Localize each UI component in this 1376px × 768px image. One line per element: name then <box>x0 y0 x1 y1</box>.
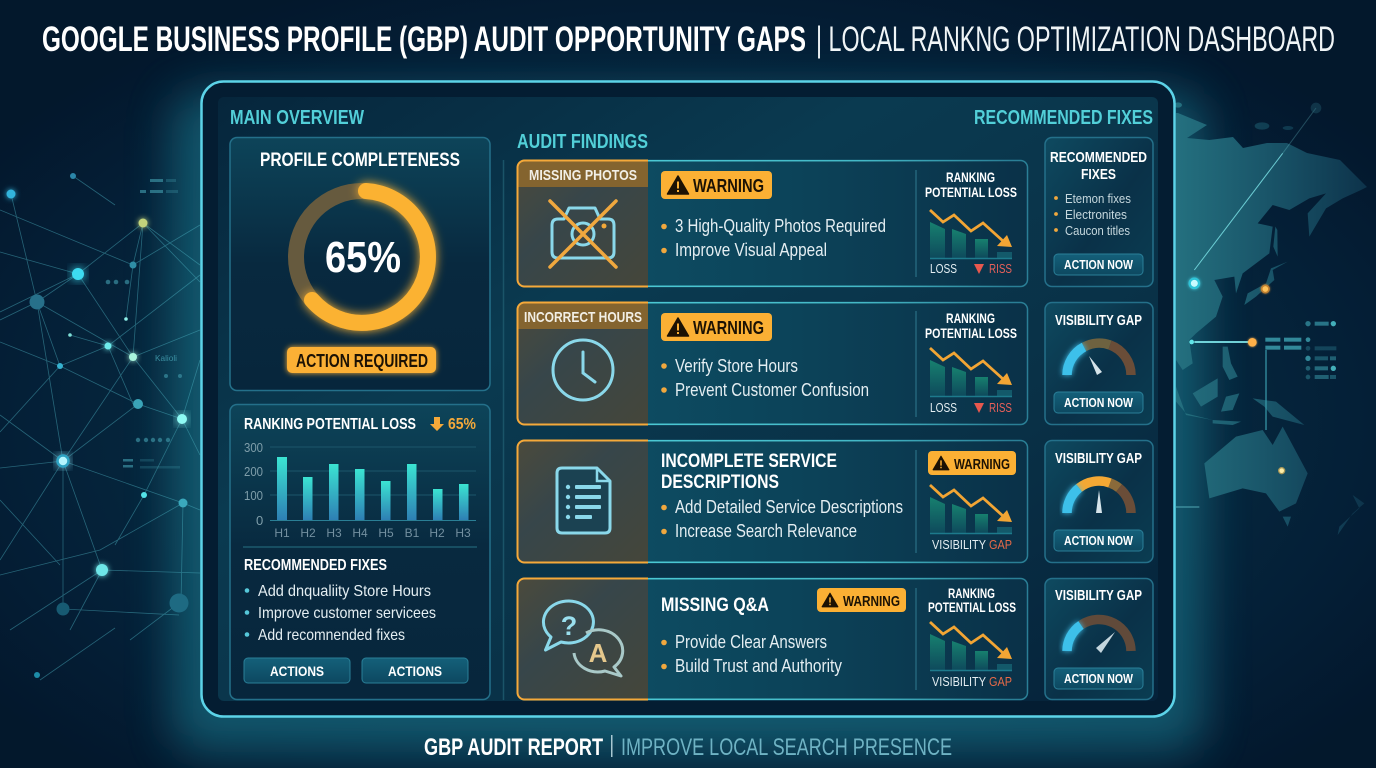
gauge <box>1067 343 1131 375</box>
chart with ranking and visibility labels <box>928 586 1016 689</box>
list: Caucon titles <box>1065 224 1130 238</box>
heading: recommended fixes: RECOMMENDED FIXES <box>244 557 387 574</box>
recommended fixes list: Add recomnended fixes <box>258 627 405 644</box>
donut chart: 65 percent <box>296 191 428 323</box>
list: Etemon fixes <box>1065 192 1131 206</box>
recommended fixes list <box>245 583 436 644</box>
bar chart: H4 <box>352 526 368 540</box>
action now button: ACTION NOW <box>1064 258 1133 272</box>
actions button <box>362 658 468 683</box>
ranking potential loss chart: RANKING <box>946 310 995 326</box>
title: GOOGLE BUSINESS PROFILE (GBP) AUDIT OPPORTUNITY GAPS <box>42 20 806 59</box>
list <box>1054 192 1131 238</box>
gauge <box>1067 481 1131 513</box>
visibility gap chart: GAP <box>989 537 1012 552</box>
panel: incomplete service descriptions <box>518 440 1028 563</box>
action now button: ACTION NOW <box>1064 534 1133 548</box>
bar chart: H3 <box>455 526 471 540</box>
bar chart: H1 <box>274 526 290 540</box>
percent value: 65% <box>325 233 401 282</box>
finding title: DESCRIPTIONS <box>661 471 779 493</box>
panel: ranking potential loss <box>230 404 490 700</box>
footer caption: IMPROVE LOCAL SEARCH PRESENCE <box>621 734 952 761</box>
heading: FIXES <box>1081 166 1116 183</box>
panel: recommended fixes mini <box>1045 138 1153 286</box>
chart with ranking and visibility labels: GAP <box>989 674 1012 689</box>
ranking potential loss chart <box>925 169 1017 276</box>
icon: question and answer bubbles <box>543 601 623 676</box>
bar chart: 200 <box>244 464 263 479</box>
ranking potential loss chart: POTENTIAL LOSS <box>925 184 1017 200</box>
warning badge: WARNING <box>693 318 764 338</box>
warning badge: WARNING <box>843 594 900 610</box>
bullet list: Increase Search Relevance <box>675 521 857 541</box>
heading <box>1050 149 1147 183</box>
finding title: MISSING Q&A <box>661 594 769 616</box>
warning badge <box>928 451 1016 475</box>
heading: VISIBILITY GAP <box>1055 313 1142 329</box>
loss indicator <box>430 416 476 433</box>
warning badge <box>661 313 772 341</box>
bar chart <box>244 440 476 540</box>
ranking potential loss chart <box>925 310 1017 415</box>
label: INCORRECT HOURS <box>524 309 642 326</box>
dashboard frame <box>202 82 1174 716</box>
network graph background <box>0 173 200 680</box>
finding title: INCOMPLETE SERVICE <box>661 450 837 472</box>
bar chart: 0 <box>256 513 263 528</box>
bullet list: Prevent Customer Confusion <box>675 380 869 400</box>
ranking potential loss chart: LOSS <box>930 261 957 276</box>
icon: question and answer bubbles: A <box>589 638 608 668</box>
warning badge: WARNING <box>954 457 1010 473</box>
action now button: ACTION NOW <box>1064 672 1133 686</box>
list: Electronites <box>1065 208 1127 222</box>
network graph background: Kalioli <box>155 354 177 363</box>
bullet list: Add Detailed Service Descriptions <box>675 497 903 517</box>
bullet list <box>661 497 903 541</box>
warning badge: WARNING <box>693 176 764 196</box>
panel: missing q and a <box>518 578 1028 700</box>
panel: visibility gap three <box>1045 578 1153 700</box>
chart with ranking and visibility labels: VISIBILITY <box>932 674 986 689</box>
icon: crossed camera <box>550 201 616 267</box>
bar chart: B1 <box>405 526 420 540</box>
panel: visibility gap two <box>1045 440 1153 562</box>
bar chart: 300 <box>244 440 263 455</box>
chart with ranking and visibility labels: RANKING <box>948 586 995 601</box>
visibility gap chart: VISIBILITY <box>932 537 986 552</box>
panel: incorrect hours <box>518 302 1028 425</box>
bullet list <box>661 632 842 676</box>
bar chart: H2 <box>429 526 445 540</box>
gauge <box>1067 619 1131 653</box>
finding title <box>661 450 837 493</box>
bar chart: H3 <box>326 526 342 540</box>
action required badge <box>287 347 436 373</box>
actions button: ACTIONS <box>388 663 442 679</box>
panel: visibility gap one <box>1045 302 1153 424</box>
icon: document <box>557 468 610 533</box>
world map background <box>1174 102 1367 535</box>
heading: RANKING POTENTIAL LOSS <box>244 416 416 433</box>
loss indicator: 65% <box>448 416 476 433</box>
ranking potential loss chart: POTENTIAL LOSS <box>925 325 1017 341</box>
bullet list <box>661 356 869 400</box>
visibility gap chart <box>930 485 1012 552</box>
footer caption <box>424 734 952 761</box>
warning badge <box>817 588 906 612</box>
warning badge <box>661 171 772 199</box>
chart with ranking and visibility labels: POTENTIAL LOSS <box>928 600 1016 615</box>
recommended fixes list: Add dnqualiity Store Hours <box>258 583 431 600</box>
panel: profile completeness <box>230 138 490 390</box>
bar chart: H2 <box>300 526 316 540</box>
panel: missing photos <box>518 160 1028 287</box>
action now button <box>1054 254 1143 275</box>
heading: RECOMMENDED <box>1050 149 1147 166</box>
icon: question and answer bubbles: ? <box>561 611 577 641</box>
ranking potential loss chart: LOSS <box>930 400 957 415</box>
ranking potential loss chart: RISS <box>989 261 1012 276</box>
action required badge: ACTION REQUIRED <box>296 351 428 371</box>
footer caption: GBP AUDIT REPORT <box>424 734 603 761</box>
action now button: ACTION NOW <box>1064 396 1133 410</box>
recommended fixes list: Improve customer servicees <box>258 605 436 622</box>
bullet list: Improve Visual Appeal <box>675 240 827 260</box>
heading: VISIBILITY GAP <box>1055 588 1142 604</box>
actions button <box>244 658 350 683</box>
ranking potential loss chart: RANKING <box>946 169 995 185</box>
bullet list: 3 High-Quality Photos Required <box>675 216 886 236</box>
icon: clock <box>553 340 613 400</box>
actions button: ACTIONS <box>270 663 324 679</box>
bar chart: H5 <box>378 526 394 540</box>
heading: audit findings: AUDIT FINDINGS <box>517 131 648 153</box>
heading: recommended fixes: RECOMMENDED FIXES <box>974 107 1153 129</box>
label: MISSING PHOTOS <box>529 167 637 184</box>
bar chart: 100 <box>244 488 263 503</box>
heading: main overview: MAIN OVERVIEW <box>230 107 364 129</box>
bullet list: Provide Clear Answers <box>675 632 827 652</box>
bullet list <box>661 216 886 260</box>
ranking potential loss chart: RISS <box>989 400 1012 415</box>
heading: VISIBILITY GAP <box>1055 451 1142 467</box>
heading: PROFILE COMPLETENESS <box>260 150 460 171</box>
bullet list: Build Trust and Authority <box>675 656 842 676</box>
bullet list: Verify Store Hours <box>675 356 798 376</box>
